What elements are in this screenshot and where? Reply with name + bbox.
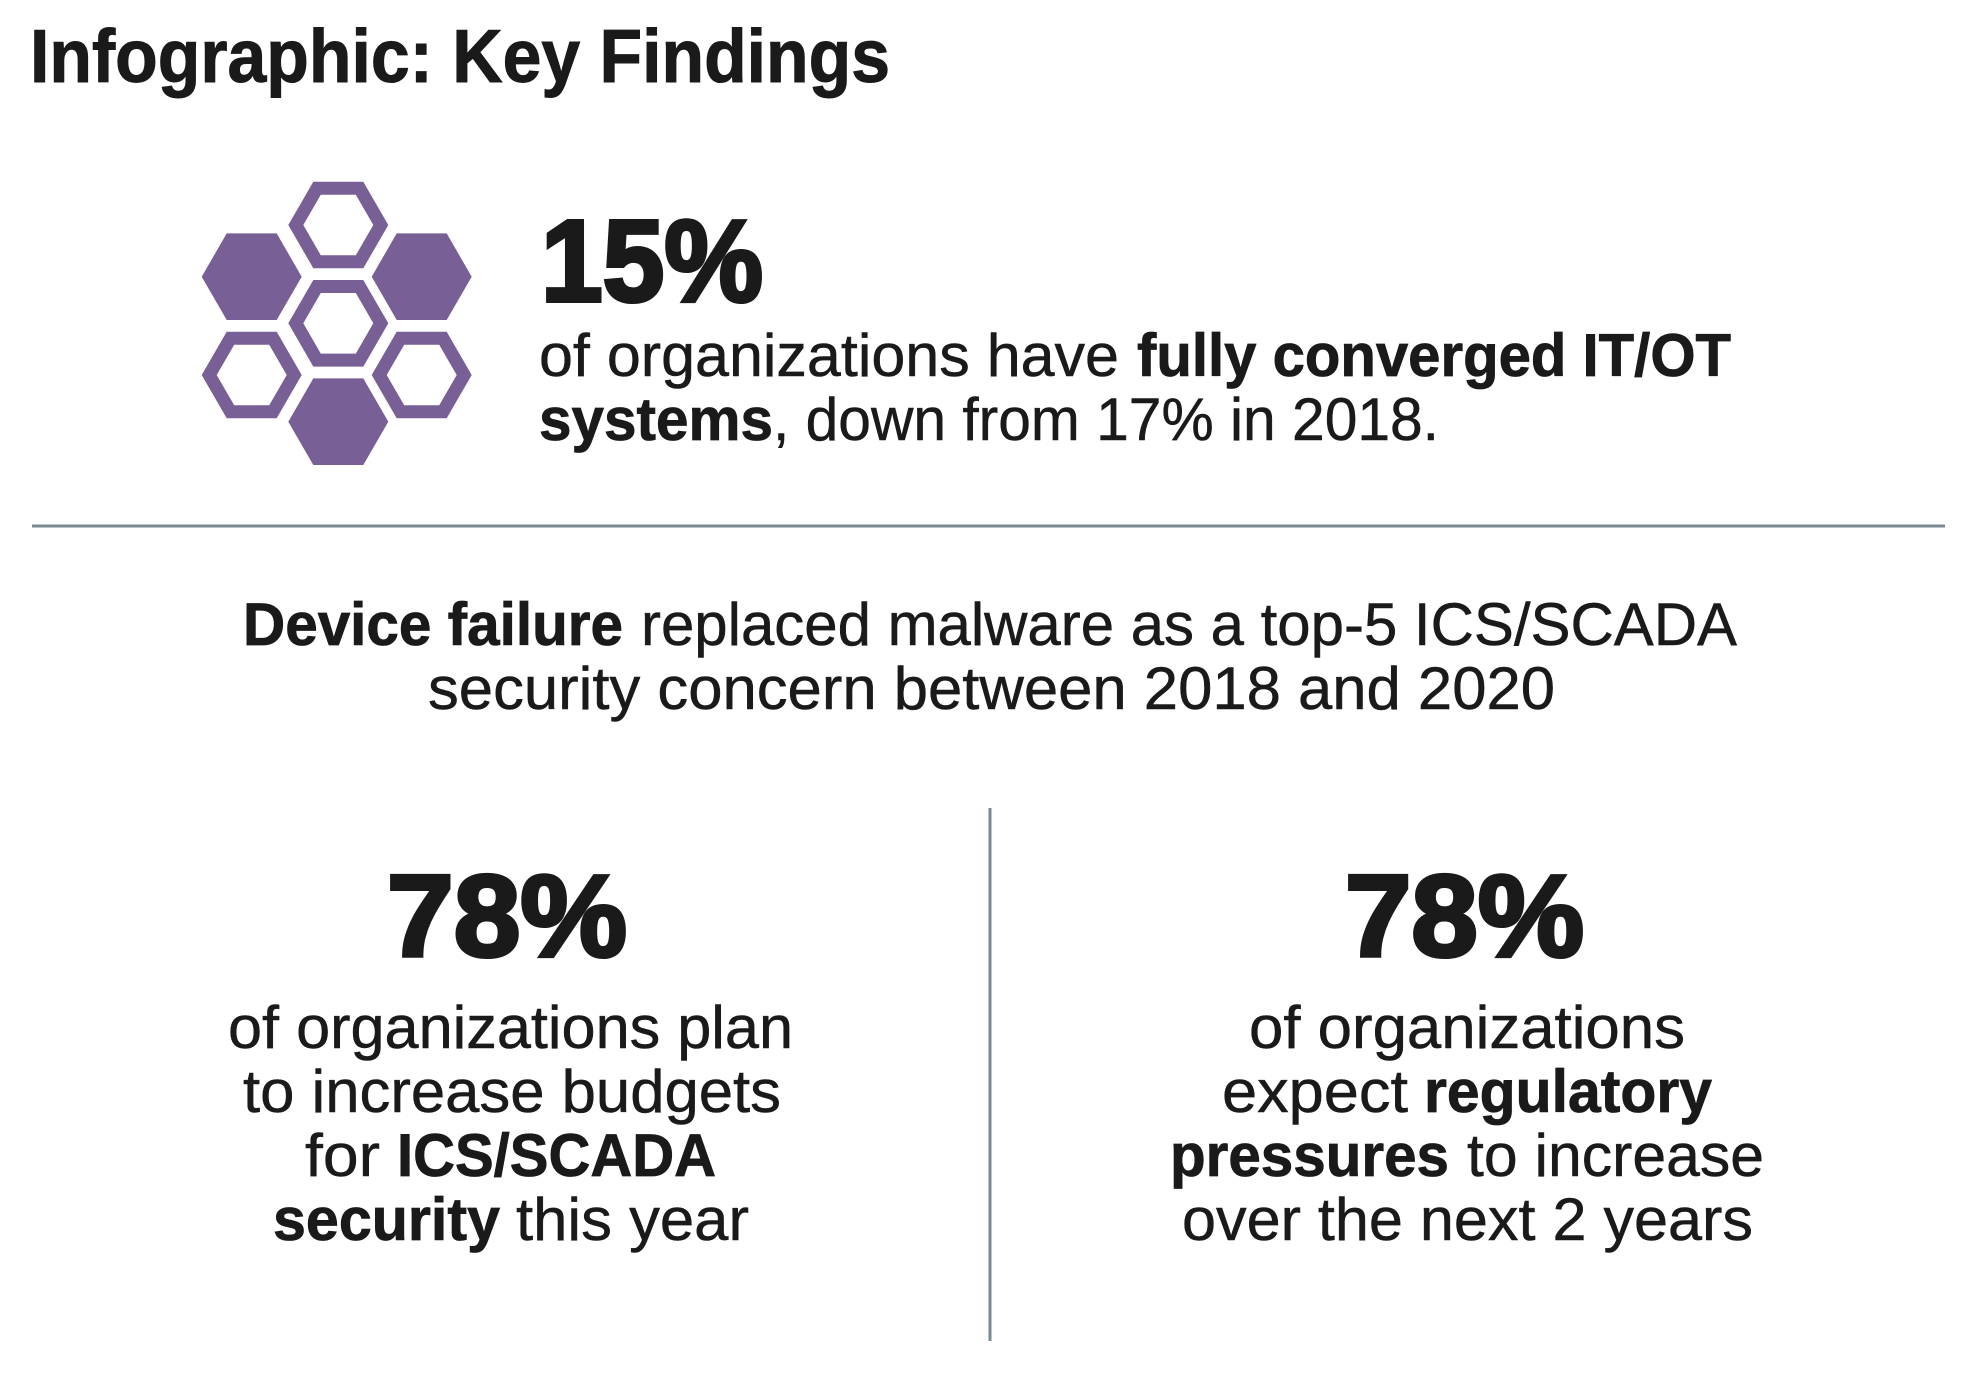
text: converged systems finding: systems	[539, 386, 773, 453]
text: device failure finding: Device failure	[243, 591, 623, 658]
stat: 15%: 15%	[541, 196, 763, 326]
text: regulatory finding: to increase	[1467, 1122, 1764, 1189]
text: device failure finding	[243, 591, 1737, 722]
text: converged systems finding	[539, 322, 1731, 453]
icon: hexagon cluster	[202, 182, 472, 465]
text: regulatory finding	[1170, 994, 1764, 1253]
text: budgets finding: this year	[516, 1186, 749, 1253]
stat: 78% regulatory: 78%	[1345, 851, 1584, 981]
text: budgets finding: security	[273, 1186, 501, 1253]
text: regulatory finding: regulatory	[1424, 1058, 1713, 1125]
text: budgets finding	[228, 994, 793, 1253]
title: Infographic: Key Findings	[30, 14, 890, 98]
text: regulatory finding: expect	[1222, 1058, 1408, 1125]
stat: 78% budgets: 78%	[387, 851, 627, 981]
text: regulatory finding: of organizations	[1249, 994, 1685, 1061]
text: converged systems finding: of organizations have	[539, 322, 1119, 389]
text: budgets finding: ICS/SCADA	[397, 1122, 716, 1189]
text: device failure finding: security concern between 2018 and 2020	[428, 655, 1555, 722]
text: budgets finding: of organizations plan	[228, 994, 793, 1061]
text: budgets finding: for	[305, 1122, 380, 1189]
text: converged systems finding: , down from 17% in 2018.	[773, 386, 1439, 453]
text: regulatory finding: pressures	[1170, 1122, 1449, 1189]
text: device failure finding: replaced malware as a top-5 ICS/SCADA	[641, 591, 1737, 658]
text: converged systems finding: fully converged IT/OT	[1137, 322, 1731, 389]
text: regulatory finding: over the next 2 years	[1182, 1186, 1753, 1253]
text: budgets finding: to increase budgets	[243, 1058, 781, 1125]
